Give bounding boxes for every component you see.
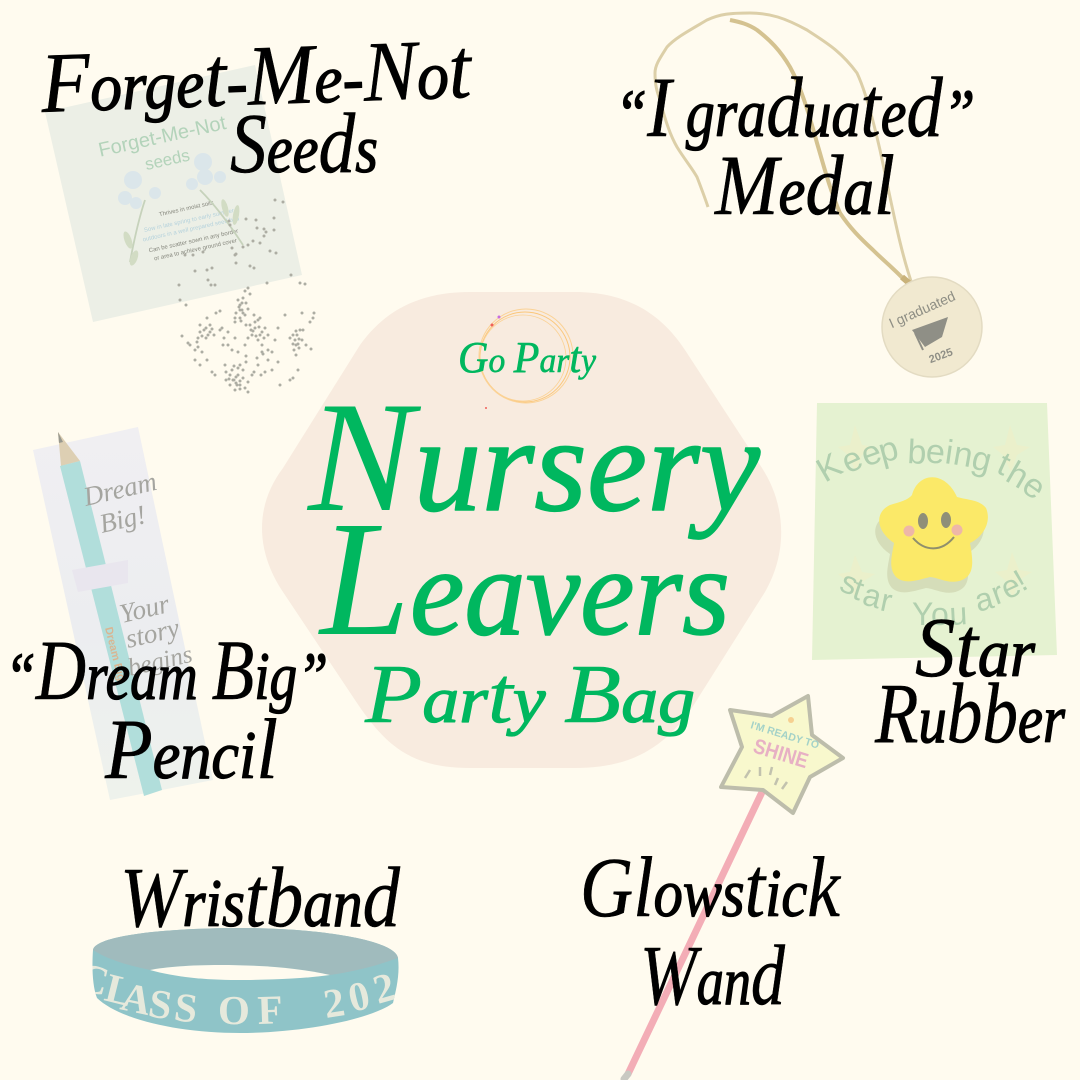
icon: smiling star rubber — [875, 477, 988, 593]
label: star rubber: Star — [915, 600, 1036, 695]
logo: go party — [458, 309, 596, 409]
label: i graduated medal — [615, 60, 975, 233]
title: nursery leavers party bag: Nursery — [306, 370, 760, 545]
illustration: dream big pencil card: Dream Big — [102, 626, 127, 682]
title: nursery leavers party bag: Leavers — [318, 487, 730, 670]
text: class of 202: 0 — [344, 971, 374, 1021]
label: star rubber — [874, 600, 1065, 761]
text: class of 202: C — [74, 953, 114, 1005]
illustration: star glowstick wand: I'M READY TO — [749, 719, 820, 752]
illustration: keep being the star card: i — [943, 433, 956, 472]
text: class of 202: S — [146, 979, 175, 1028]
illustration: keep being the star card: o — [931, 596, 949, 632]
illustration: keep being the star card: t — [849, 570, 869, 607]
illustration: star glowstick wand — [624, 696, 843, 1079]
title: nursery leavers party bag: Party Bag — [364, 648, 695, 741]
illustration: keep being the star card: e — [1015, 465, 1053, 507]
icon: forget-me-not flowers — [118, 153, 243, 267]
illustration: keep being the star card: r — [878, 582, 896, 619]
illustration: dream big pencil card: begins — [125, 641, 195, 682]
illustration: star glowstick wand: SHINE — [751, 735, 811, 773]
illustration: keep being the star card: e — [856, 432, 887, 475]
illustration: dream big pencil card — [33, 427, 213, 800]
label: forget-me-not seeds: Forget-Me-Not — [38, 21, 474, 131]
panel: central hexagon — [262, 292, 781, 768]
illustration: keep being the star card: b — [907, 433, 927, 472]
illustration: forget-me-not seed packet: or area to achieve ground cover — [154, 238, 238, 262]
illustration: keep being the star card: e — [995, 566, 1026, 606]
text: class of 202: O — [218, 987, 250, 1033]
illustration: keep being the star card: e — [835, 439, 869, 481]
logo: go party: Go Party — [458, 333, 596, 382]
label: glowstick wand — [580, 840, 842, 1023]
illustration: scattered seeds — [179, 200, 314, 392]
illustration: dream big pencil card: story — [123, 612, 182, 654]
label: glowstick wand: Glowstick — [580, 840, 842, 935]
label: i graduated medal: “I graduated” — [615, 60, 975, 155]
text: class of 202: A — [117, 973, 156, 1024]
illustration: keep being the star card: ! — [1008, 562, 1033, 598]
text: class of 202: F — [257, 986, 282, 1033]
label: forget-me-not seeds — [38, 21, 474, 191]
icon: wooden medal disc: I graduated — [886, 288, 958, 331]
illustration: keep being the star card — [810, 403, 1057, 660]
illustration: forget-me-not seed packet: Sow in late spring to early summer — [144, 208, 235, 234]
icon: wooden medal disc — [882, 277, 982, 377]
illustration: keep being the star card: r — [986, 574, 1009, 612]
text: class of 202: L — [101, 964, 138, 1015]
illustration: forget-me-not seed packet: outdoors in a well prepared seed bed — [142, 216, 240, 243]
illustration: forget-me-not seed packet: seeds — [143, 146, 192, 174]
illustration: keep being the star card: Y — [912, 596, 933, 632]
illustration: keep being the star card: t — [992, 445, 1017, 483]
text: class of 202: 2 — [320, 978, 348, 1027]
illustration: keep being the star card: h — [1000, 454, 1035, 496]
illustration: dream big pencil card: Your — [117, 588, 173, 629]
illustration: keep being the star card: p — [874, 429, 902, 471]
illustration: dream big pencil card: Big! — [97, 499, 149, 539]
label: glowstick wand: Wand — [640, 928, 786, 1023]
illustration: keep being the star card: s — [835, 563, 864, 602]
label: dream big pencil — [5, 623, 328, 797]
label: wristband: Wristband — [120, 850, 401, 945]
illustration: dream big pencil card: Dream — [80, 466, 159, 512]
illustration: class of wristband — [74, 928, 400, 1033]
illustration: graduation medal with ribbon — [655, 13, 982, 377]
illustration: forget-me-not seed packet: Thrives in moist soils — [159, 200, 214, 218]
label: dream big pencil: Pencil — [104, 702, 278, 797]
label: dream big pencil: “Dream Big” — [5, 623, 328, 718]
illustration: keep being the star card: a — [970, 579, 997, 619]
illustration: forget-me-not seed packet — [45, 65, 302, 322]
illustration: keep being the star card: n — [951, 434, 976, 475]
label: i graduated medal: Medal — [714, 138, 895, 233]
illustration: keep being the star card: K — [810, 446, 849, 490]
label: star rubber: Rubber — [874, 666, 1065, 761]
illustration: keep being the star card: u — [948, 595, 968, 632]
text: class of 202: 2 — [368, 963, 400, 1013]
illustration: keep being the star card: e — [924, 432, 947, 472]
icon: wooden medal disc: 2025 — [927, 346, 955, 366]
text: class of 202 — [92, 966, 395, 1024]
illustration: forget-me-not seed packet: Forget-Me-Not — [96, 112, 229, 162]
label: forget-me-not seeds: Seeds — [230, 96, 378, 191]
text: class of 202: S — [172, 983, 200, 1032]
illustration: forget-me-not seed packet: Can be scatter sown in any border — [148, 229, 239, 254]
illustration: keep being the star card: g — [968, 439, 996, 480]
title: nursery leavers party bag — [306, 370, 760, 741]
illustration: keep being the star card: a — [859, 576, 886, 615]
